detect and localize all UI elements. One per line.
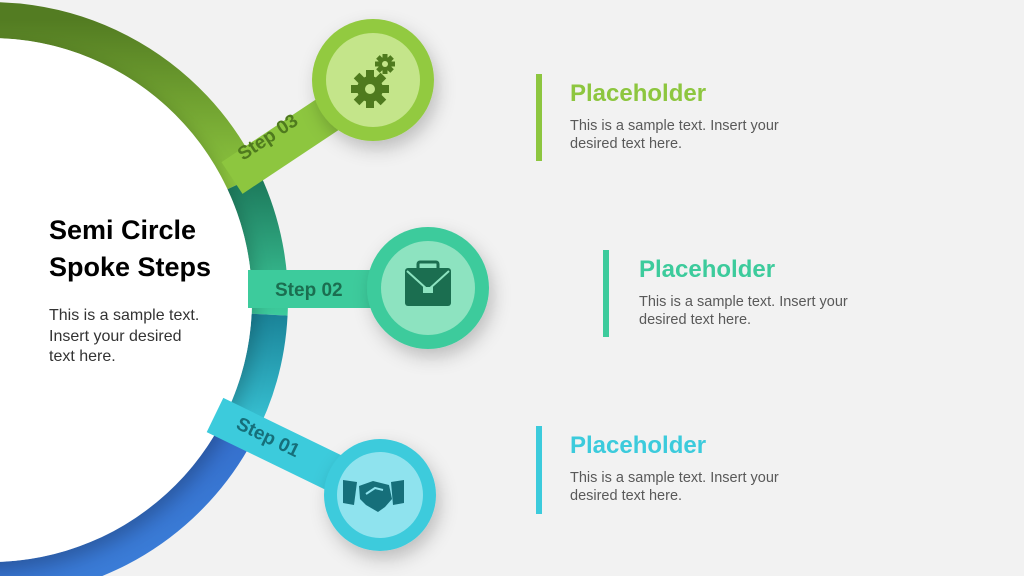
panel: step 1 text: This is a sample text. Insert your (570, 470, 779, 486)
circle step 2 (367, 227, 489, 349)
panel: step 3 text: Placeholder (570, 80, 706, 107)
panel: step 1 text (536, 426, 779, 514)
icon: briefcase (405, 262, 451, 306)
title: Semi Circle (49, 215, 196, 245)
spoke 1 (207, 398, 390, 513)
intro text (49, 307, 199, 365)
spoke 2: Step 02 (275, 280, 343, 301)
spoke 3: Step 03 (234, 110, 302, 165)
title: Spoke Steps (49, 252, 211, 282)
intro text: Insert your desired (49, 328, 182, 344)
panel: step 2 text: desired text here. (639, 312, 751, 328)
spoke 1: Step 01 (233, 414, 303, 462)
panel: step 1 text: Placeholder (570, 432, 706, 459)
panel: step 2 text: Placeholder (639, 256, 775, 283)
panel: step 3 text: desired text here. (570, 136, 682, 152)
panel: step 2 text: This is a sample text. Insert your (639, 294, 848, 310)
icon: gears (351, 54, 395, 108)
circle step 3 (312, 19, 434, 141)
icon: handshake (343, 480, 404, 512)
white semi circle (0, 38, 252, 562)
title (49, 215, 211, 282)
spoke 2 (248, 270, 428, 308)
spoke 3 (221, 68, 384, 194)
panel: step 3 text (536, 74, 779, 161)
ring (0, 20, 270, 576)
circle step 1 (324, 439, 436, 551)
panel: step 2 text (603, 250, 848, 337)
intro text: This is a sample text. (49, 307, 199, 324)
panel: step 3 text: This is a sample text. Insert your (570, 118, 779, 134)
panel: step 1 text: desired text here. (570, 488, 682, 504)
intro text: text here. (49, 348, 116, 365)
